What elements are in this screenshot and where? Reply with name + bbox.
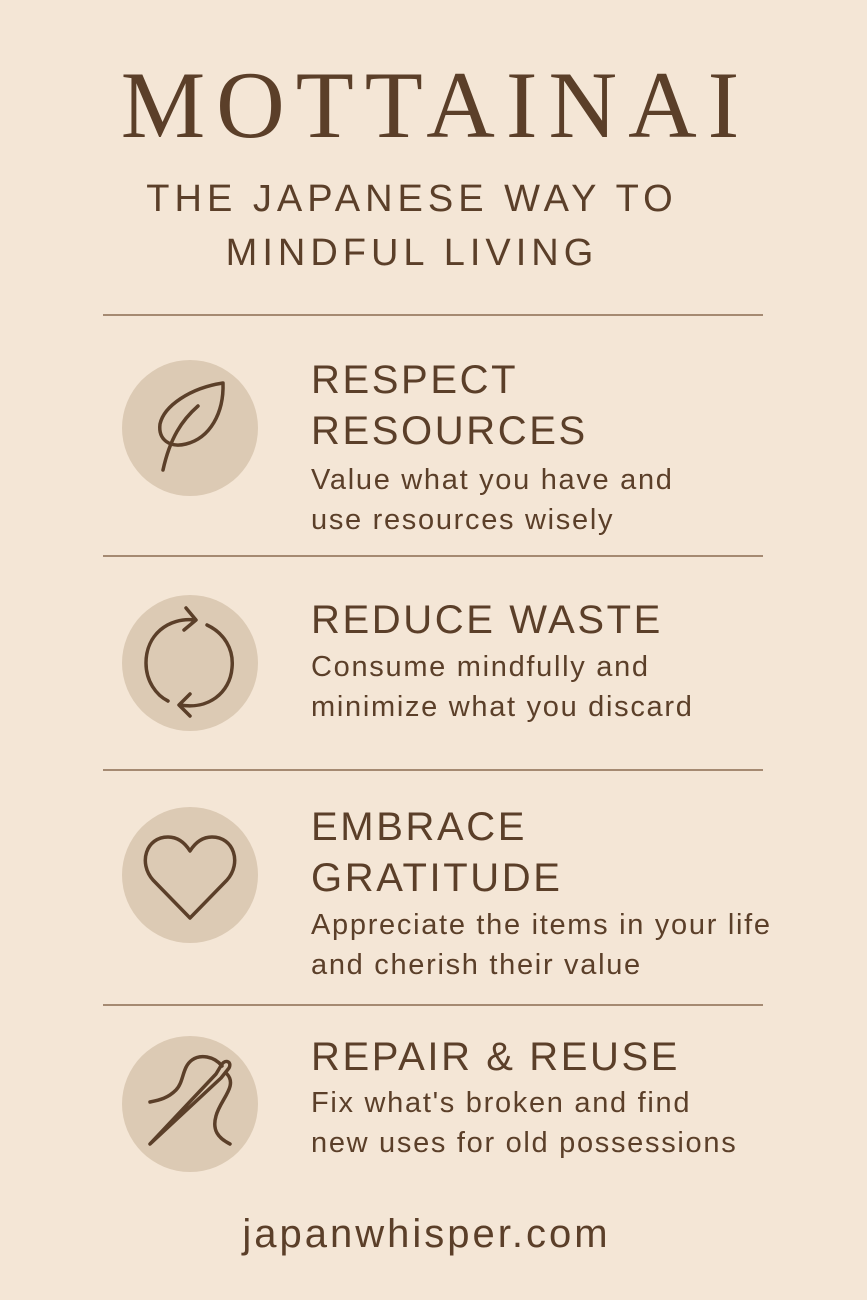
subtitle: [146, 178, 678, 274]
text: GRATITUDE: [311, 856, 563, 900]
text: respect: Value what you have and: [311, 464, 674, 496]
subtitle: MINDFUL LIVING: [226, 232, 598, 274]
icon: leaf: [122, 360, 258, 496]
heading: reduce waste: REDUCE WASTE: [311, 598, 663, 642]
panel: respect resources: [122, 360, 258, 496]
text: new uses for old possessions: [311, 1127, 737, 1159]
text: RESOURCES: [311, 409, 588, 453]
text: gratitude: Appreciate the items in your life: [311, 909, 772, 941]
heading: repair & reuse: REPAIR & REUSE: [311, 1035, 680, 1079]
icon: needle and thread: [122, 1036, 258, 1172]
heading: respect resources: RESPECT: [311, 358, 518, 402]
text: use resources wisely: [311, 504, 614, 536]
title: MOTTAINAI: [121, 52, 750, 158]
subtitle: THE JAPANESE WAY TO: [146, 178, 678, 220]
icon: heart: [122, 807, 258, 943]
heading: embrace gratitude: EMBRACE: [311, 805, 527, 849]
text: reduce: Consume mindfully and: [311, 651, 650, 683]
footer: japanwhisper.com: [242, 1212, 611, 1256]
text: repair: Fix what's broken and find: [311, 1087, 691, 1119]
text: and cherish their value: [311, 949, 642, 981]
text: minimize what you discard: [311, 691, 694, 723]
icon: recycle arrows: [122, 595, 258, 731]
